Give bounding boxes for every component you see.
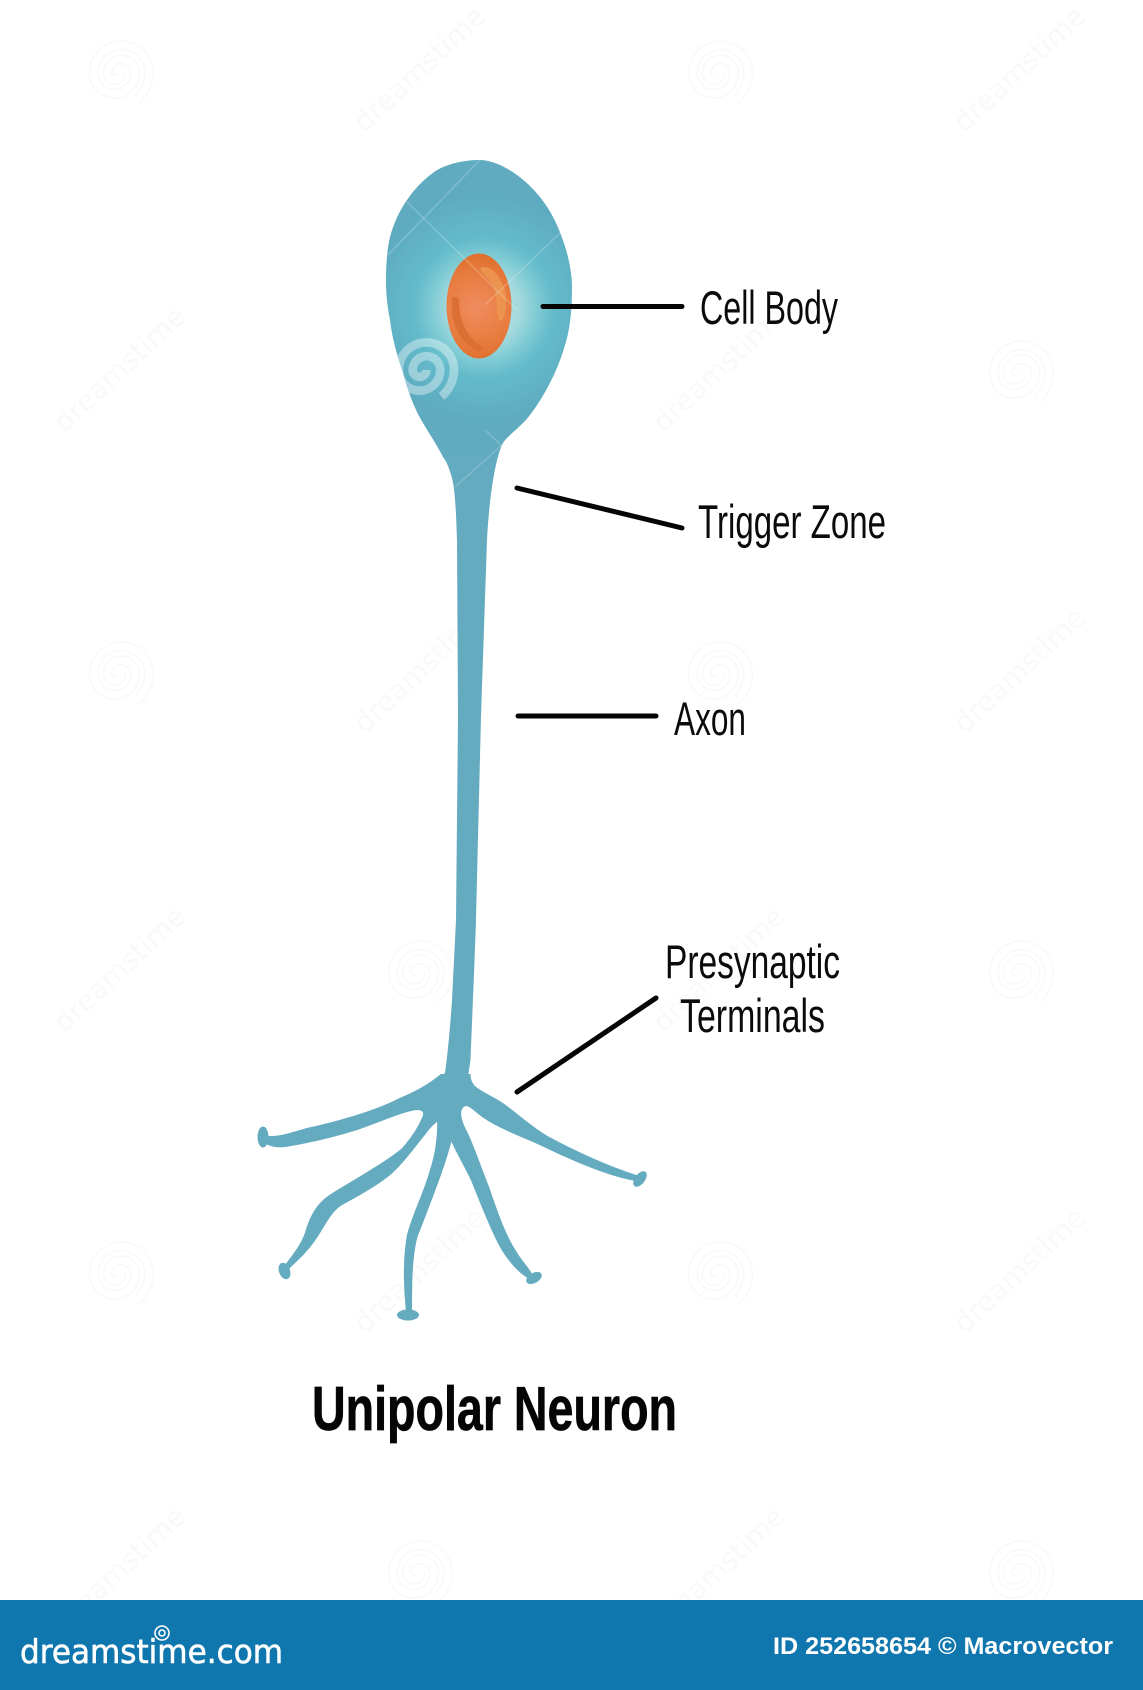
label: Presynaptic Terminals: Terminals — [680, 989, 825, 1042]
label: Cell Body: Cell Body — [700, 281, 838, 334]
footer logo text: dreamstime.com — [20, 1632, 283, 1671]
watermark pattern: dreamstime — [47, 900, 192, 1038]
image credit: ID 252658654 © Macrovector — [773, 1633, 1113, 1660]
branch thickening — [266, 1074, 637, 1310]
leader line: Presynaptic Terminals — [517, 998, 656, 1092]
label: Trigger Zone: Trigger Zone — [698, 495, 886, 548]
label: Axon: Axon — [674, 692, 746, 745]
watermark pattern: dreamstime — [646, 900, 791, 1038]
watermark pattern: dreamstime — [47, 300, 192, 438]
watermark pattern: dreamstime — [347, 0, 492, 138]
watermark pattern: dreamstime — [347, 601, 492, 739]
cell body, axon and branching terminals — [266, 160, 636, 1312]
watermark pattern: dreamstime — [646, 300, 791, 438]
watermark pattern: dreamstime — [347, 1201, 492, 1339]
watermark pattern: dreamstime — [947, 601, 1092, 739]
label: Trigger Zone — [517, 488, 886, 548]
leader line: Cell Body — [543, 304, 682, 309]
nucleus — [446, 254, 512, 358]
title: Unipolar Neuron — [312, 1375, 677, 1444]
leader line: Axon — [518, 714, 656, 718]
icon: logo spiral — [155, 1626, 169, 1640]
watermark pattern: dreamstime — [947, 1201, 1092, 1339]
label: Presynaptic Terminals — [517, 935, 840, 1092]
watermark pattern: dreamstime — [47, 1500, 192, 1638]
label: Presynaptic Terminals: Presynaptic — [665, 935, 840, 988]
neuron illustration — [258, 160, 649, 1320]
leader line: Trigger Zone — [517, 488, 682, 528]
watermark pattern: dreamstime — [947, 0, 1092, 138]
terminal buttons — [258, 1126, 649, 1320]
watermark pattern: dreamstime — [646, 1500, 791, 1638]
footer bar — [0, 1600, 1143, 1690]
